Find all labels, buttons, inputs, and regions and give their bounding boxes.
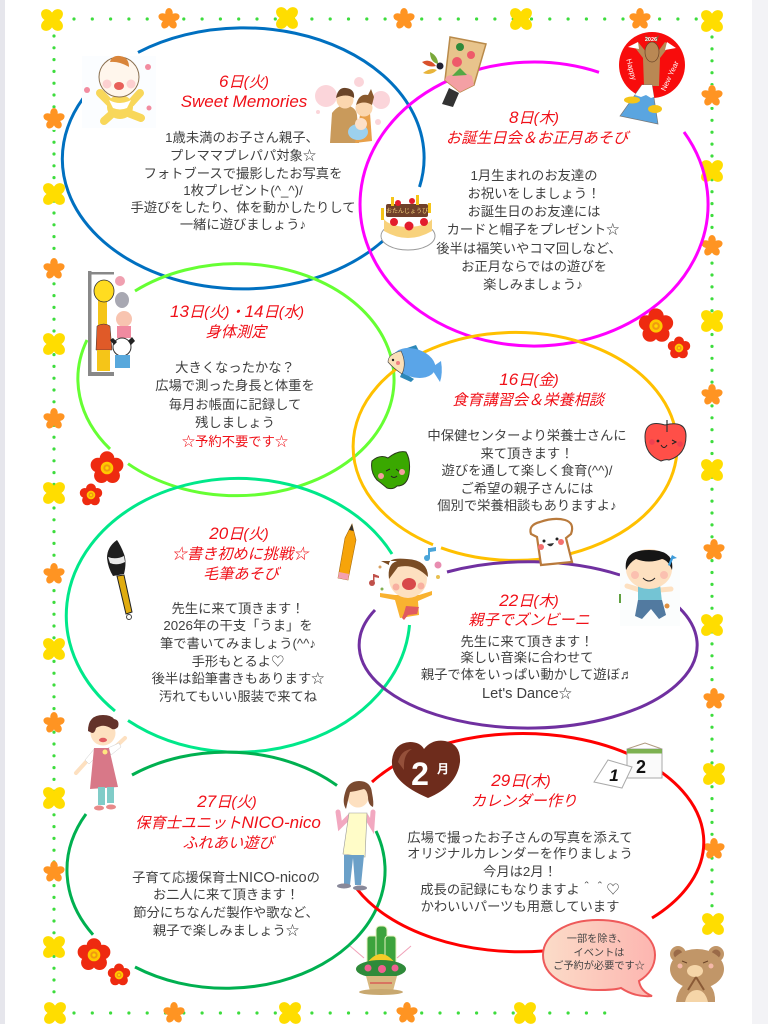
text block: 20日: 先生に来て頂きます！ bbox=[172, 601, 304, 616]
text block: 13日 bbox=[155, 360, 315, 449]
heading: 6日: Sweet Memories bbox=[181, 92, 308, 111]
icon: new year horse sticker bbox=[619, 32, 685, 124]
text block: 20日: 筆で書いてみましょう(^^♪ bbox=[160, 636, 316, 651]
icon: family bbox=[315, 77, 390, 143]
text block: 29日 bbox=[407, 829, 633, 914]
heading: 16日 bbox=[452, 370, 607, 409]
text block: 16日 bbox=[427, 427, 627, 513]
icon: heart 2月: 月 bbox=[437, 762, 449, 776]
panel: 8日 お誕生日会 bbox=[360, 62, 708, 346]
panel outline: amber ellipse bbox=[353, 332, 677, 560]
icon: woman with yellow apron bbox=[337, 781, 373, 890]
icon: calendar bbox=[594, 743, 662, 788]
heading: 8日: 8日(木) bbox=[509, 108, 559, 127]
heading: 13日 bbox=[170, 302, 304, 341]
text block: 6日: プレママプレパパ対象☆ bbox=[170, 148, 316, 163]
text block: 29日: かわいいパーツも用意しています bbox=[421, 899, 619, 914]
text block: 13日: ☆予約不要です☆ bbox=[182, 434, 288, 449]
callout: reservation note bbox=[543, 920, 655, 996]
icon: calendar: 1 bbox=[609, 766, 619, 785]
icon: green pepper bbox=[372, 452, 410, 489]
text block: 29日: 成長の記録にもなりますよ＾＾♡ bbox=[420, 880, 620, 897]
heading: 13日: 13日(火)・14日(水) bbox=[170, 302, 304, 321]
icon: new year horse sticker: Happy bbox=[624, 58, 639, 81]
icon: fish bbox=[388, 343, 442, 383]
panel: 6日 Sweet Memories bbox=[62, 28, 424, 289]
heading: 20日: 20日(火) bbox=[208, 524, 269, 543]
heading: 6日 bbox=[181, 72, 308, 111]
text block: 8日: カードと帽子をプレゼント☆ bbox=[447, 222, 619, 237]
heading: 27日: 27日(火) bbox=[196, 792, 257, 811]
text block: 20日: 手形もとるよ♡ bbox=[192, 654, 284, 669]
text block: 6日 bbox=[130, 130, 356, 232]
text block: 6日: フォトブースで撮影したお写真を bbox=[144, 165, 342, 181]
text block: 29日: 広場で撮ったお子さんの写真を添えて bbox=[407, 829, 633, 845]
text block: 29日: 今月は2月！ bbox=[483, 864, 557, 879]
icon: woman with apron bbox=[76, 715, 125, 810]
panel: 16日 食育講習会 bbox=[353, 332, 677, 560]
icon: apple bbox=[645, 420, 686, 461]
icon: new year horse sticker: 2026 bbox=[645, 37, 657, 43]
text block: 8日: 1月生まれのお友達の bbox=[470, 168, 598, 183]
heading: 13日: 身体測定 bbox=[206, 324, 268, 341]
panel outline: lime ellipse bbox=[78, 264, 394, 496]
heading: 16日: 食育講習会＆栄養相談 bbox=[452, 392, 607, 409]
text block: 20日 bbox=[152, 601, 324, 704]
text block: 22日 bbox=[421, 634, 633, 702]
heading: 29日 bbox=[471, 771, 577, 810]
heading: 20日 bbox=[172, 524, 310, 583]
text block: 8日: 楽しみましょう♪ bbox=[483, 277, 583, 292]
text block: 8日: 後半は福笑いやコマ回しなど、 bbox=[436, 241, 622, 256]
icon: heart 2月: 2 bbox=[411, 756, 429, 792]
heading: 22日 bbox=[468, 591, 590, 629]
icon: singing girl bbox=[369, 547, 442, 620]
icon: new year horse sticker: New Year bbox=[659, 59, 681, 92]
panel outline: green ellipse bbox=[67, 752, 385, 988]
icon: hagoita bbox=[422, 37, 486, 107]
text block: 22日: 楽しい音楽に合わせて bbox=[461, 650, 593, 665]
text block: 27日: 節分にちなんだ製作や歌など、 bbox=[133, 904, 319, 920]
heading: 8日 bbox=[446, 108, 631, 147]
heading: 16日: 16日(金) bbox=[499, 370, 559, 389]
text block: 6日: 手遊びをしたり、体を動かしたりして bbox=[130, 200, 356, 215]
text block: 20日: 汚れてもいい服装で来てね bbox=[159, 689, 317, 704]
text block: 27日: お二人に来て頂きます！ bbox=[153, 887, 299, 902]
icon: calligraphy brush bbox=[107, 540, 132, 620]
heading: 29日: カレンダー作り bbox=[471, 793, 577, 810]
heading: 27日 bbox=[135, 792, 321, 852]
panel: 29日 カレンダー作り bbox=[357, 734, 704, 952]
icon: baby bbox=[82, 56, 156, 128]
text block: 27日: 子育て応援保育士NICO-nicoの bbox=[132, 870, 320, 886]
heading: 27日: 保育士ユニットNICO-nico bbox=[135, 813, 321, 832]
text block: 8日: お誕生日のお友達には bbox=[468, 204, 600, 219]
heading: 8日: お誕生日会＆お正月あそび bbox=[446, 130, 631, 147]
icon: dancing boy bbox=[619, 549, 680, 626]
text block: 27日 bbox=[132, 870, 320, 938]
icon: birthday cake bbox=[381, 195, 435, 250]
heading: 22日: 22日(木) bbox=[498, 591, 559, 610]
text block: 16日: ご希望の親子さんには bbox=[461, 481, 593, 496]
icon: height chart with giraffe bbox=[88, 271, 135, 376]
text block: 22日: 親子で体をいっぱい動かして遊ぼ♬ bbox=[421, 667, 633, 682]
panel: 27日 ふれあい遊び bbox=[67, 752, 385, 988]
text block: 22日: 先生に来て頂きます！ bbox=[461, 634, 593, 649]
icon: plum blossoms top right bbox=[639, 308, 690, 358]
text block: 8日 bbox=[436, 168, 622, 292]
text block: 13日: 広場で測った身長と体重を bbox=[155, 378, 315, 393]
heading: 20日: 毛筆あそび bbox=[203, 566, 282, 583]
text block: 16日: 個別で栄養相談もありますよ♪ bbox=[437, 497, 617, 513]
panel outline: purple ellipse bbox=[359, 562, 697, 728]
text block: 8日: お正月ならではの遊びを bbox=[461, 259, 607, 274]
text block: 8日: お祝いをしましょう！ bbox=[468, 186, 600, 201]
heading: 20日: ☆書き初めに挑戦☆ bbox=[172, 546, 310, 563]
heading: 29日: 29日(木) bbox=[490, 771, 551, 790]
text block: 13日: 残しましょう bbox=[195, 415, 275, 430]
text block: 27日: 親子で楽しみましょう☆ bbox=[153, 923, 299, 938]
panel outline: red ellipse bbox=[357, 734, 704, 952]
text block: 6日: 一緒に遊びましょう♪ bbox=[180, 217, 306, 232]
text block: 16日: 中保健センターより栄養士さんに bbox=[427, 427, 627, 443]
icon: kadomatsu bbox=[350, 926, 411, 995]
text block: 16日: 来て頂きます！ bbox=[480, 446, 574, 461]
panel: 20日 毛筆あそび bbox=[66, 478, 410, 752]
panel: 22日 親子でズンビーニ bbox=[359, 562, 697, 728]
callout: reservation note: イベントは bbox=[574, 947, 624, 959]
heading: 6日: 6日(火) bbox=[219, 72, 269, 91]
panel: 13日・14日 身体測定 bbox=[78, 264, 394, 496]
text block: 6日: 1枚プレゼント(^_^)/ bbox=[183, 183, 303, 198]
panel outline: magenta ellipse bbox=[360, 62, 708, 346]
icon: plum blossoms bottom left bbox=[78, 938, 130, 985]
heading: 22日: 親子でズンビーニ bbox=[468, 612, 590, 629]
text block: 13日: 大きくなったかな？ bbox=[175, 360, 295, 375]
text block: 6日: 1歳未満のお子さん親子、 bbox=[165, 130, 319, 145]
icon: heart 2月 bbox=[392, 741, 460, 798]
heading: 27日: ふれあい遊び bbox=[182, 835, 276, 852]
panel outline: blue ellipse bbox=[62, 28, 424, 289]
callout: reservation note: ご予約が必要です☆ bbox=[553, 959, 645, 972]
panel outline: spring green ellipse bbox=[66, 478, 410, 752]
icon: calendar: 2 bbox=[636, 757, 646, 777]
text block: 29日: オリジナルカレンダーを作りましょう bbox=[407, 846, 633, 861]
text block: 16日: 遊びを通して楽しく食育(^^)/ bbox=[442, 463, 613, 478]
icon: bread bbox=[530, 519, 572, 565]
icon: pencil bbox=[338, 524, 356, 580]
icon: birthday cake: おたんじょうび bbox=[386, 207, 428, 215]
icon: plum blossoms left bbox=[80, 451, 123, 505]
text block: 20日: 後半は鉛筆書きもあります☆ bbox=[152, 671, 324, 686]
callout: reservation note: 一部を除き、 bbox=[567, 932, 627, 945]
icon: bear bbox=[670, 946, 724, 1002]
text block: 20日: 2026年の干支「うま」を bbox=[163, 618, 313, 633]
text block: 13日: 毎月お帳面に記録して bbox=[169, 397, 301, 412]
text block: 22日: Let's Dance☆ bbox=[482, 686, 572, 702]
